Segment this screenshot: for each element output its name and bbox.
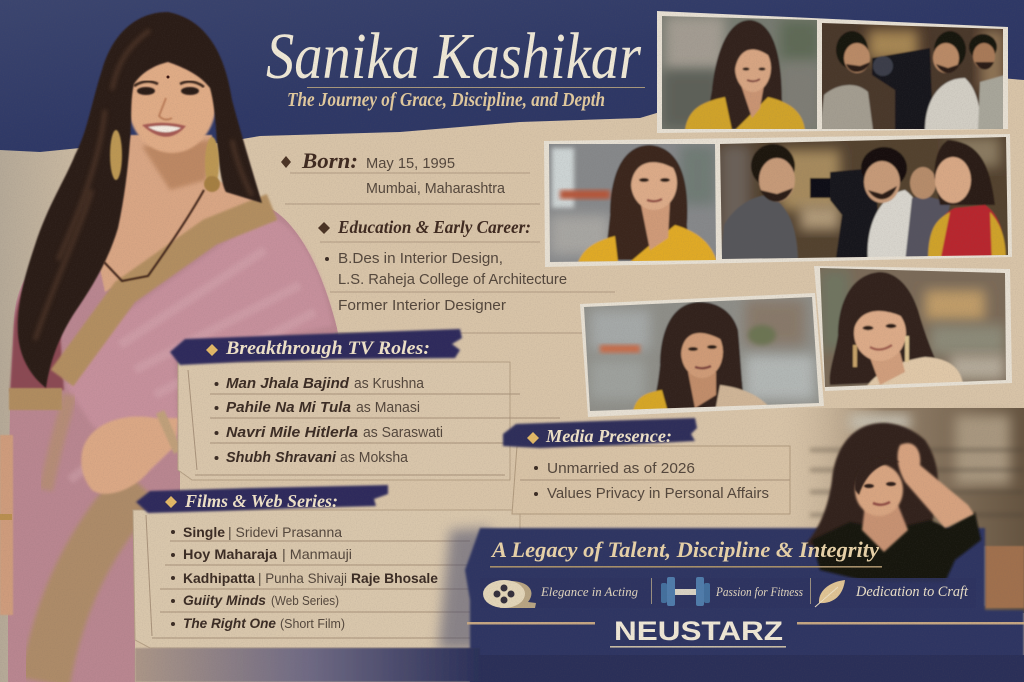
role 4: as Moksha [340, 449, 409, 466]
arm at left edge [0, 435, 13, 615]
education diamond [318, 222, 330, 234]
film 1 [171, 524, 342, 540]
ribbon [170, 329, 462, 365]
film 5: (Short Film) [280, 616, 345, 631]
legacy rule [490, 566, 882, 568]
birthplace: Mumbai, Maharashtra [366, 180, 506, 197]
ribbon heading: Films & Web Series: [184, 491, 338, 511]
photo 4: smiling woman [814, 265, 1012, 391]
role 2 [214, 399, 420, 416]
role 1: Man Jhala Bajind [226, 375, 350, 392]
role 1 [214, 375, 425, 392]
film 4: (Web Series) [271, 593, 339, 608]
hair highlights [35, 30, 252, 340]
role 2: as Manasi [356, 399, 420, 416]
frame [544, 134, 1012, 267]
ribbon heading: Media Presence: [545, 426, 672, 446]
film 4 [171, 592, 339, 608]
main portrait: woman in pink saree [0, 12, 340, 682]
lower right portrait [805, 423, 981, 582]
photo strip 2 [544, 134, 1013, 267]
card [512, 446, 790, 514]
role 2: Pahile Na Mi Tula [226, 399, 351, 416]
title: Sanika Kashikar [266, 20, 641, 93]
photo strip 1 [655, 10, 1010, 135]
hair [18, 12, 262, 388]
film 3: | Punha Shivaji [258, 570, 347, 586]
top navy header band [0, 0, 1024, 152]
earrings and necklace [104, 130, 220, 281]
icon: film reel [483, 580, 536, 608]
title rule [307, 87, 645, 88]
role 3 [214, 424, 443, 441]
ribbon [503, 418, 697, 448]
arm [898, 443, 974, 528]
photo: men by camera [822, 23, 1003, 129]
black top [812, 512, 981, 582]
pink pallu [66, 214, 333, 470]
role 1: as Krushna [354, 375, 425, 392]
card [133, 510, 520, 648]
film 1: Single [183, 524, 225, 540]
role 3: Navri Mile Hitlerla [226, 424, 358, 441]
ribbon diamond [527, 432, 539, 444]
right footer rule [797, 622, 1024, 624]
education heading: Education & Early Career: [337, 217, 531, 237]
gold neckline border [62, 207, 272, 378]
frame [814, 266, 1012, 391]
left footer rule [467, 622, 595, 624]
frame [657, 11, 1008, 133]
panel: breakthrough TV roles [170, 329, 560, 480]
divider [810, 578, 811, 604]
hair fringe [855, 459, 900, 495]
icon: dumbbell [661, 577, 710, 606]
ribbon [136, 485, 388, 513]
brand underline [610, 646, 786, 648]
gold lower border [45, 485, 140, 682]
ribbon heading: Breakthrough TV Roles: [225, 338, 430, 359]
born diamond [281, 156, 291, 168]
film 3 [171, 570, 438, 586]
item 1: Unmarried as of 2026 [547, 460, 695, 477]
role 3: as Saraswati [363, 424, 443, 441]
hand [81, 412, 178, 494]
neck and chest [96, 135, 262, 292]
panel: media presence [503, 418, 790, 514]
left grey paper strip [0, 148, 130, 682]
photo: film crew [718, 134, 1013, 262]
birth date: May 15, 1995 [366, 155, 455, 172]
former job: Former Interior Designer [338, 297, 506, 314]
item 2: Values Privacy in Personal Affairs [547, 485, 769, 502]
subtitle: The Journey of Grace, Discipline, and Depth [287, 89, 605, 111]
label: fitness: Passion for Fitness [715, 584, 803, 599]
film 5 [171, 615, 345, 631]
photo: woman in yellow shirt [545, 140, 720, 265]
face [855, 464, 903, 516]
ribbon diamond [206, 344, 218, 356]
icon: leaf [815, 580, 845, 607]
label: craft: Dedication to Craft [855, 584, 969, 600]
film 2: Hoy Maharaja [183, 546, 277, 562]
panel: films and web series [133, 485, 520, 648]
brows, eyes, nose, bindi [134, 76, 204, 120]
blurred photo background lower right [770, 408, 1024, 613]
degree: B.Des in Interior Design, [338, 250, 503, 267]
face [128, 53, 216, 153]
role 4 [214, 449, 409, 466]
panel: biography [281, 148, 615, 333]
frame [580, 293, 824, 417]
college: L.S. Raheja College of Architecture [338, 271, 567, 288]
legacy strip [480, 578, 976, 608]
film 4: Guiity Minds [183, 592, 266, 608]
saree silhouette [8, 203, 340, 682]
neck shadow [142, 140, 212, 190]
film 2 [171, 546, 352, 562]
bangle [0, 514, 12, 520]
neck [862, 505, 908, 552]
smile [142, 123, 186, 137]
facial features [864, 482, 896, 505]
film 3: Kadhipatta [183, 570, 255, 586]
film 2: | Manmauji [282, 546, 352, 562]
card [178, 362, 510, 480]
education bullet [325, 257, 329, 261]
film 1: | Sridevi Prasanna [228, 524, 342, 540]
hair [805, 423, 938, 550]
photo 3: woman in beige saree [580, 293, 825, 417]
role 4: Shubh Shravani [226, 449, 337, 466]
film 5: The Right One [183, 615, 276, 631]
divider [651, 578, 652, 604]
bottom navy band [135, 528, 1024, 682]
photo: woman in yellow shirt [662, 16, 817, 129]
legacy heading: A Legacy of Talent, Discipline & Integrity [490, 537, 879, 562]
film 3: Raje Bhosale [351, 570, 438, 586]
label: elegance: Elegance in Acting [540, 584, 638, 599]
blouse sleeve [10, 255, 64, 392]
born heading: Born: [301, 148, 358, 173]
ribbon diamond [165, 496, 177, 508]
brand name: NEUSTARZ [614, 616, 783, 646]
